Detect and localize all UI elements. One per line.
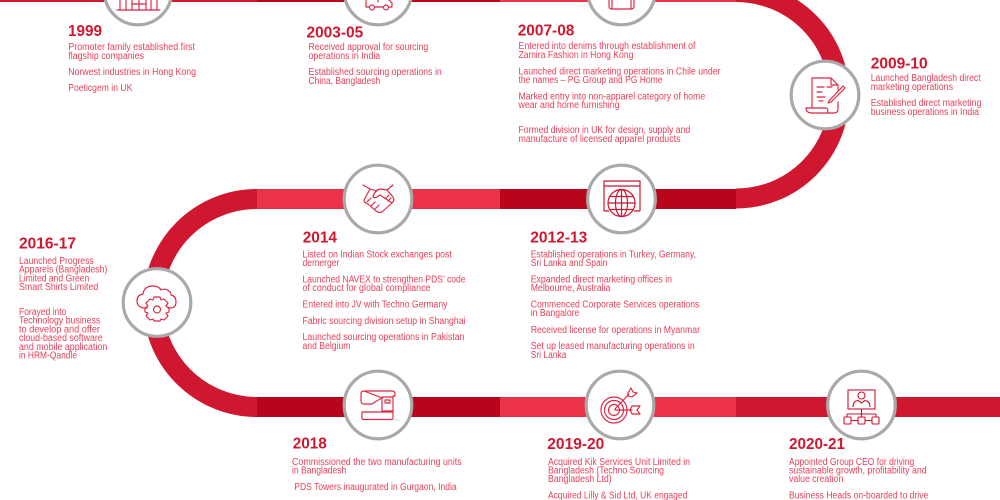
milestone: 2016-17: Smart Shirts Limited: [19, 282, 98, 293]
node: 2019-20 target and arrows icon: [586, 371, 654, 439]
milestone: 2016-17: Limited and Green: [19, 273, 89, 284]
milestone: 2019-20: Acquired Kik Services Unit Limited in: [548, 457, 690, 468]
milestone: 2016-17: in HRM-Qandle: [19, 350, 77, 362]
milestone: 2018: [292, 435, 462, 493]
milestone: 2009-10: [871, 55, 981, 118]
milestone: 2012-13: Established operations in Turkey, Germany,: [531, 250, 696, 260]
milestone: 2007-08: [518, 23, 721, 145]
milestone: 2003-05: 2003-05: [306, 24, 363, 41]
milestone: 2012-13: Expanded direct marketing offices in: [531, 274, 672, 286]
milestone: 2012-13: Sri Lanka: [531, 350, 567, 361]
milestone: 2012-13: Sri Lanka and Spain: [531, 258, 607, 269]
milestone: 1999: flagship companies: [68, 51, 144, 62]
milestone: 2007-08: Marked entry into non-apparel category of home: [518, 92, 706, 102]
milestone: 2007-08: the names – PG Group and PG Home: [518, 75, 663, 86]
milestone: 2018: 2018: [293, 435, 327, 452]
milestone: 1999: Poeticgem in UK: [68, 83, 133, 94]
milestone: 2009-10: Launched Bangladesh direct: [871, 73, 981, 84]
milestone: 2014: Entered into JV with Techno Germany: [302, 300, 448, 310]
milestone: 2016-17: cloud-based software: [19, 333, 103, 344]
node: 2018 sewing machine icon: [344, 371, 412, 439]
milestone: 2016-17: Apparels (Bangladesh): [19, 265, 107, 276]
milestone: 2016-17: Launched Progress: [19, 256, 94, 267]
milestone: 1999: 1999: [68, 23, 102, 40]
milestone: 2003-05: [306, 24, 442, 87]
milestone: 2016-17: Forayed into: [19, 307, 67, 318]
milestone: 2019-20: 2019-20: [547, 436, 604, 453]
node: 2007-08 sofa icon: [588, 0, 655, 25]
milestone: 1999: Norwest industries in Hong Kong: [68, 67, 196, 78]
milestone: 2020-21: Appointed Group CEO for driving: [789, 457, 914, 468]
milestone: 2012-13: Received license for operations in Myanmar: [531, 325, 701, 336]
milestone: 1999: [68, 23, 196, 94]
milestone: 2016-17: to develop and offer: [19, 324, 101, 335]
milestone: 2014: [302, 229, 466, 352]
milestone: 1999: Promoter family established first: [68, 42, 195, 53]
milestone: 2018: Commissioned the two manufacturing units: [292, 457, 462, 468]
milestone: 2007-08: Formed division in UK for design, supply and: [518, 125, 690, 136]
milestone: 2020-21: value creation: [789, 474, 843, 485]
milestone: 2007-08: Zamira Fashion in Hong Kong: [518, 50, 634, 61]
node: 2003-05 truck icon: [344, 0, 412, 25]
milestone: 2012-13: Set up leased manufacturing operations in: [531, 341, 695, 352]
milestone: 2007-08: 2007-08: [518, 23, 574, 40]
milestone: 2007-08: manufacture of licensed apparel products: [518, 134, 681, 145]
milestone: 2014: Launched sourcing operations in Pakistan: [302, 332, 464, 343]
milestone: 2019-20: Bangladesh (Techno Sourcing: [548, 466, 664, 477]
milestone: 2016-17: and mobile application: [19, 342, 107, 353]
milestone: 2007-08: wear and home furnishing: [518, 100, 620, 111]
node: 1999 factory icon: [104, 0, 172, 25]
milestone: 2009-10: marketing operations: [871, 82, 953, 93]
milestone: 2012-13: Melbourne, Australia: [531, 283, 611, 294]
node: 2016-17 cloud and gear icon: [123, 269, 191, 336]
milestone: 2003-05: Received approval for sourcing: [308, 42, 428, 53]
milestone: 2012-13: 2012-13: [530, 229, 587, 246]
milestone: 2007-08: Entered into denims through establishment of: [518, 41, 696, 52]
milestone: 2014: 2014: [303, 229, 337, 246]
node: 2009-10 document and pen icon: [791, 61, 859, 129]
milestone: 2019-20: [547, 436, 690, 500]
milestone: 2016-17: 2016-17: [19, 236, 76, 252]
milestone: 2016-17: [19, 236, 107, 362]
milestone: 2009-10: business operations in India: [871, 107, 979, 118]
milestone: 2003-05: China, Bangladesh: [308, 76, 380, 87]
milestone: 2014: Launched NAVEX to strengthen PDS’ code: [302, 274, 466, 286]
milestone: 2003-05: operations in India: [308, 51, 381, 62]
milestone: 2018: in Bangladesh: [292, 466, 346, 477]
milestone: 2019-20: Bangladesh Ltd): [548, 474, 612, 485]
milestone: 2020-21: 2020-21: [789, 436, 845, 453]
node: 2012-13 web globe icon: [588, 165, 655, 233]
milestone: 2014: Fabric sourcing division setup in Shanghai: [302, 316, 466, 327]
milestone: 2007-08: Launched direct marketing operations in Chile under: [518, 66, 721, 78]
milestone: 2012-13: [530, 229, 701, 361]
milestone: 2012-13: in Bangalore: [531, 308, 580, 319]
node: 2014 handshake icon: [344, 165, 412, 233]
milestone: 2018: PDS Towers inaugurated in Gurgaon, India: [294, 482, 457, 493]
milestone: 2014: of conduct for global compliance: [302, 283, 431, 294]
node: 2020-21 presenter and org chart icon: [828, 371, 895, 439]
milestone: 2016-17: Technology business: [19, 316, 100, 327]
milestone: 2014: and Belgium: [302, 341, 350, 352]
milestone: 2020-21: sustainable growth, profitability and: [789, 466, 927, 477]
milestone: 2012-13: Commenced Corporate Services operations: [531, 300, 699, 310]
milestone: 2009-10: Established direct marketing: [871, 98, 981, 109]
milestone: 2014: demerger: [302, 258, 340, 269]
milestone: 2009-10: 2009-10: [871, 55, 928, 72]
milestone: 2020-21: [789, 436, 929, 500]
milestone: 2003-05: Established sourcing operations in: [308, 67, 442, 78]
milestone: 2014: Listed on Indian Stock exchanges post: [302, 250, 452, 260]
